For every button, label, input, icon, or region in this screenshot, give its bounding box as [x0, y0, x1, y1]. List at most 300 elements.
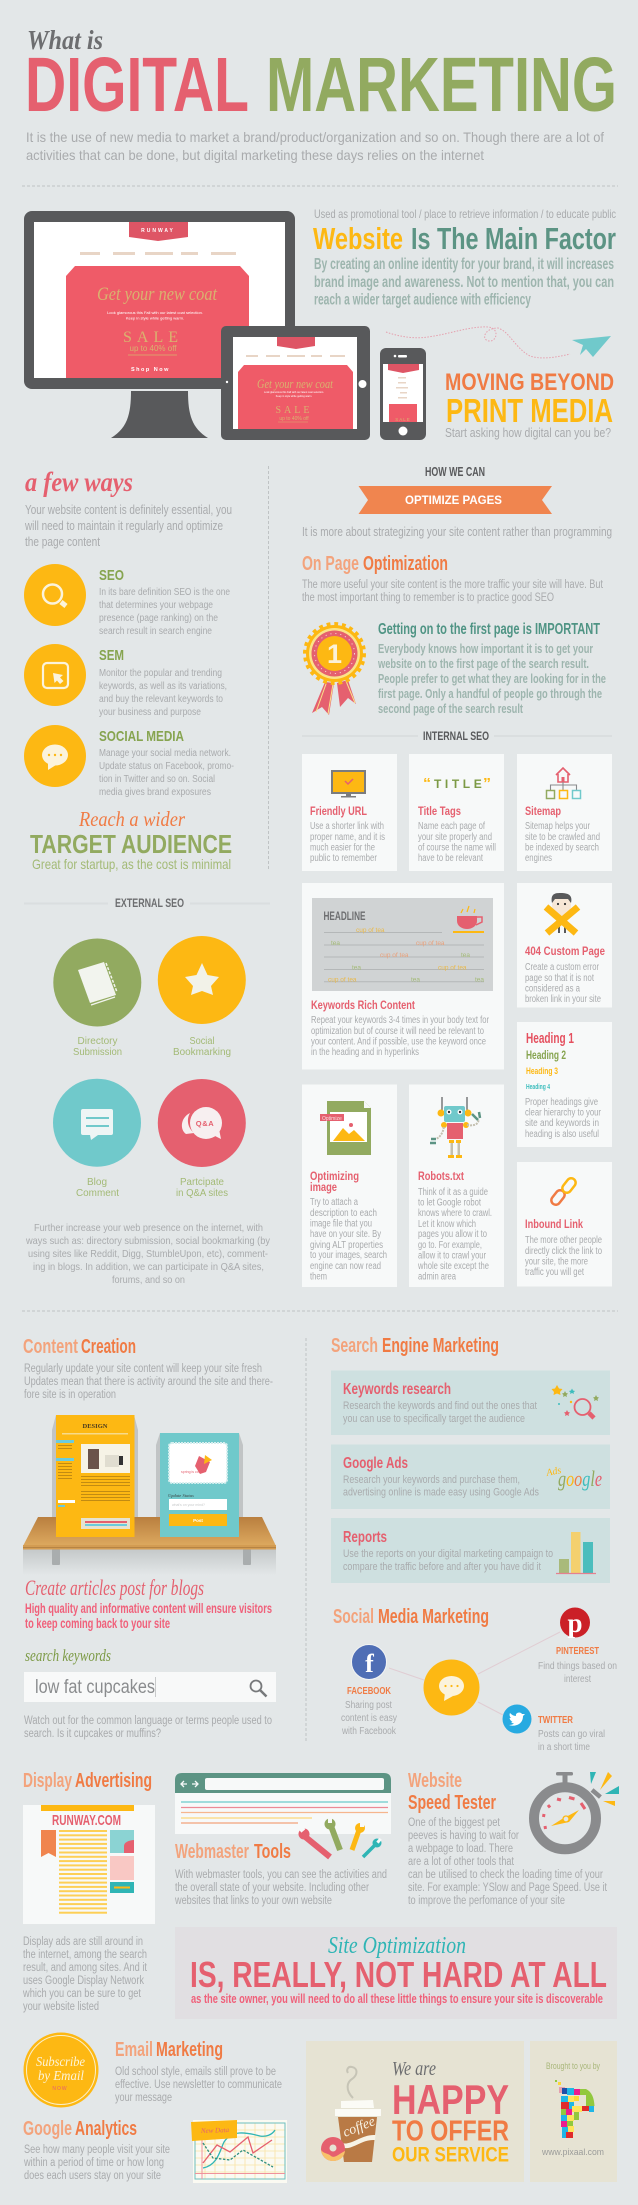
card: optimizing image: Optimize — [322, 1116, 342, 1122]
icon: desktop monitor: SALE — [123, 329, 183, 346]
heading: display advertising: Display — [23, 1770, 73, 1792]
facebook text: with Facebook — [341, 1726, 397, 1737]
icon: first place medal: 1 — [327, 639, 342, 669]
box: reports: Use the reports on your digital marketing campaign to — [343, 1548, 553, 1560]
heading: search engine marketing — [331, 1335, 499, 1357]
icon: google script: Ads — [544, 1465, 562, 1479]
box: google ads: Google Ads — [343, 1455, 408, 1472]
box: keywords research — [331, 1370, 610, 1435]
intro text: It is the use of new media to market a brand/product/organization and so on. Though there are a lot of — [26, 129, 604, 145]
card: sitemap: site to be crawled and — [525, 832, 600, 843]
page: teal status mockup: Update Status — [168, 1493, 194, 1498]
heading: on page optimization — [302, 553, 448, 575]
speed tester text: peeves is having to wait for — [408, 1830, 519, 1842]
icon: SEO magnifier — [24, 564, 86, 626]
webmaster text: the overall state of your website. Including other — [175, 1882, 369, 1894]
webmaster text: websites that links to your own website — [174, 1895, 332, 1907]
icon: pinterest: p — [567, 1608, 583, 1638]
heading: on page optimization: Optimization — [363, 553, 448, 575]
title: DIGITAL — [25, 42, 249, 128]
intro paragraph: Your website content is definitely essential, you — [25, 503, 232, 517]
page: teal status mockup: what's on your mind? — [172, 1503, 205, 1507]
card: keywords rich content: tea — [461, 952, 470, 959]
webmaster text: With webmaster tools, you can see the activities and — [175, 1869, 387, 1881]
card: title tags: of course the name will — [418, 842, 496, 854]
card: inbound link: traffic you will get — [525, 1267, 584, 1278]
heading: webmaster tools: Webmaster — [175, 1840, 249, 1863]
circle labels: Bookmarking — [173, 1047, 231, 1058]
box: keywords research: you can use to specifically target the audience — [343, 1413, 525, 1425]
card: keywords rich content: your content. And if possible, use the keyword once — [311, 1036, 486, 1048]
icon: paper plane with dotted trail — [386, 327, 611, 358]
SEO text: search result in search engine — [99, 626, 212, 637]
card: 404 custom page: Create a custom error — [525, 962, 600, 973]
we are happy text: OUR SERVICE — [392, 2144, 509, 2167]
heading: website speed tester — [408, 1770, 496, 1814]
card: optimizing image: to your images, search — [310, 1250, 387, 1261]
intro paragraph — [24, 503, 232, 549]
search keywords: search. Is it cupcakes or muffins? — [24, 1728, 161, 1740]
icon: coffee and donut: coffee — [341, 2114, 377, 2141]
ribbon: optimize pages: OPTIMIZE PAGES — [405, 495, 502, 507]
pinterest text: interest — [564, 1674, 591, 1685]
card: sitemap: Sitemap — [525, 804, 561, 818]
card: title tags: have to be relevant — [418, 853, 483, 864]
icon: cup of tea — [453, 906, 484, 933]
heading: content creation — [23, 1336, 136, 1358]
icon: Q and A bubble — [158, 1079, 246, 1167]
icon: tablet: SALE — [276, 405, 312, 416]
banner: site optimization — [175, 1927, 617, 2019]
facebook text: Sharing post — [345, 1700, 392, 1711]
SEO text: that determines your webpage — [99, 600, 213, 611]
card: keywords rich content: tea — [352, 964, 361, 972]
website main factor text: Website — [313, 222, 403, 256]
SEM text: keywords, as well as its variations, — [99, 681, 227, 692]
on page text: the most important thing to remember is to practice good SEO — [302, 592, 554, 604]
card: optimizing image — [302, 1084, 397, 1287]
icon: desktop monitor: Get your new coat — [97, 284, 218, 305]
intro paragraph: will need to maintain it regularly and optimize — [24, 519, 223, 533]
card: sitemap: be indexed by search — [525, 842, 599, 854]
display advertising text: uses Google Display Network — [23, 1975, 144, 1987]
card: inbound link: directly click the link to — [525, 1246, 602, 1257]
card: robots.txt: to let Google robot — [418, 1198, 481, 1208]
card: inbound link: Inbound Link — [525, 1217, 583, 1231]
intro text — [26, 129, 604, 163]
panel: optimize pages — [302, 465, 612, 1287]
heading: search engine marketing: Search — [331, 1335, 378, 1357]
card: title tags: Title Tags — [418, 804, 461, 818]
on page text — [302, 579, 604, 604]
card: keywords rich content: Keywords Rich Content — [311, 998, 415, 1012]
social media text — [99, 728, 234, 798]
card: sitemap: engines — [525, 853, 552, 864]
heading: content creation: Creation — [81, 1336, 136, 1358]
panel: website speed tester — [408, 1770, 619, 1907]
card: title tags: TITLE — [434, 777, 485, 791]
card: robots.txt: pages you allow it to — [418, 1229, 487, 1240]
social media text: Update status on Facebook, promo- — [99, 761, 234, 772]
icon: stars and magnifier — [552, 1385, 599, 1418]
facebook text — [341, 1685, 397, 1737]
icon: desktop monitor: RUNWAY — [141, 228, 175, 234]
banner: site optimization: Site Optimization — [328, 1933, 466, 1959]
email text: Old school style, emails still prove to be — [115, 2066, 276, 2078]
logo: pixel P — [555, 2080, 594, 2138]
icon: desktop monitor — [24, 211, 295, 438]
card: keywords rich content: Repeat your keywords 3-4 times in your body text for — [311, 1015, 490, 1026]
card: keywords rich content: cup of tea — [328, 976, 357, 984]
facebook text: content is easy — [341, 1713, 397, 1724]
card: keywords rich content: in the heading and in hyperlinks — [311, 1047, 419, 1058]
panel: search engine marketing — [331, 1335, 610, 1583]
we are happy text: We are — [392, 2058, 436, 2080]
icon: subscribe by email badge: by Email — [38, 2069, 84, 2084]
panel: happy to offer our service — [306, 2041, 524, 2182]
card: keywords rich content: cup of tea — [438, 964, 467, 972]
card: headings: Heading 2 — [526, 1048, 566, 1062]
icon: wrenches — [298, 1817, 382, 1857]
search keywords: Watch out for the common language or terms people used to — [24, 1715, 272, 1727]
speed tester text: One of the biggest pet — [408, 1817, 501, 1829]
icon: coffee and donut — [321, 2067, 381, 2162]
heading: external SEO: EXTERNAL SEO — [115, 896, 184, 910]
title: What is — [27, 25, 103, 55]
heading: social media marketing — [333, 1606, 489, 1628]
icon: bookmark star — [158, 936, 246, 1024]
content text — [24, 1363, 273, 1401]
box: keywords research: Research the keywords and find out the ones that — [343, 1400, 537, 1412]
illustration: browser window — [175, 1773, 391, 1834]
heading: webmaster tools: Tools — [254, 1840, 291, 1863]
box: google ads — [331, 1444, 610, 1509]
heading: social media marketing: Media Marketing — [378, 1606, 489, 1628]
icon: google script: google — [558, 1466, 602, 1491]
card: keywords rich content: tea — [475, 976, 484, 984]
heading: google analytics — [23, 2118, 137, 2140]
search keywords: search keywords — [25, 1646, 111, 1665]
icon: Q and A bubble: Q&A — [196, 1119, 214, 1128]
target audience callout: TARGET AUDIENCE — [30, 829, 232, 859]
icon: stopwatch — [534, 1772, 619, 1849]
card: title tags: Name each page of — [418, 821, 485, 832]
intro text: activities that can be done, but digital marketing these days relies on the internet — [26, 147, 484, 163]
social media text: tion in Twitter and so on. Social — [99, 774, 215, 785]
content text: Updates mean that there is activity around the site and there- — [24, 1376, 273, 1388]
icon: tablet: Look glamorous this Fall with our latest coat selection. — [264, 391, 324, 394]
heading: search engine marketing: Engine Marketing — [382, 1335, 499, 1357]
card: optimizing image: engine can now read — [310, 1261, 381, 1272]
callout: create articles — [25, 1575, 272, 1631]
illustration: shelf with pages — [23, 1415, 276, 1575]
SEM text: Monitor the popular and trending — [99, 668, 222, 679]
card: friendly URL: Friendly URL — [310, 804, 367, 818]
panel: email marketing — [24, 2032, 282, 2108]
card: headings — [517, 1022, 612, 1147]
card: optimizing image: image — [310, 1180, 337, 1194]
icon: smartphone — [380, 348, 426, 440]
box: reports — [331, 1518, 610, 1583]
card: robots.txt: knows where to crawl. — [418, 1208, 492, 1219]
email text: effective. Use newsletter to communicate — [115, 2079, 282, 2091]
ribbon: optimize pages — [358, 486, 552, 514]
panel: webmaster tools — [174, 1773, 391, 1907]
display advertising text: your website listed — [23, 2001, 99, 2013]
card: robots.txt: go to. For example, — [418, 1240, 482, 1251]
icon: subscribe by email badge — [24, 2032, 98, 2108]
icon: bar chart — [556, 1532, 596, 1574]
webmaster text — [174, 1869, 387, 1907]
search keywords — [24, 1646, 276, 1740]
card: friendly URL: proper name, and it is — [310, 832, 385, 843]
card: 404 custom page: considered as a — [525, 984, 580, 994]
card: optimizing image: image file that you — [310, 1218, 372, 1230]
we are happy text: HAPPY — [392, 2076, 509, 2123]
email text: your message — [115, 2092, 172, 2104]
panel: social media marketing — [333, 1606, 617, 1753]
ad mockup — [23, 1805, 155, 1924]
display advertising text: Display ads are still around in — [23, 1936, 143, 1948]
card: inbound link: your site, the more — [525, 1256, 588, 1268]
ad mockup: RUNWAY.COM — [52, 1812, 121, 1829]
box: keywords research: Keywords research — [343, 1381, 451, 1398]
card: title tags: your site properly and — [418, 832, 492, 843]
SEM text: SEM — [99, 647, 124, 664]
callout: create articles: to keep coming back to your site — [25, 1615, 170, 1631]
card: friendly URL: much easier for the — [310, 842, 375, 854]
card: optimizing image: Try to attach a — [310, 1197, 358, 1208]
icon: tablet — [221, 326, 370, 440]
card: robots.txt: allow it to crawl your — [418, 1250, 487, 1262]
icon: facebook: f — [365, 1649, 374, 1678]
analytics text: within a period of time or how long — [23, 2157, 164, 2169]
panel: content creation — [23, 1336, 276, 1740]
card: keywords rich content: cup of tea — [380, 952, 409, 959]
first page important text: second page of the search result — [378, 701, 523, 716]
card: keywords rich content: optimization but of course it will need be relevant to — [311, 1026, 484, 1037]
display advertising text: result, and among sites. And it — [23, 1962, 148, 1974]
card: friendly URL: Use a shorter link with — [310, 821, 384, 832]
pinterest text: PINTEREST — [556, 1646, 599, 1657]
website main factor text: reach a wider target audience with efficiency — [314, 292, 531, 308]
card: title tags: “ — [423, 775, 431, 792]
icon: tablet: up to 40% off — [279, 416, 309, 422]
circle labels: Comment — [76, 1188, 119, 1199]
circle labels: Partcipate — [180, 1177, 224, 1188]
icon: facebook — [352, 1644, 386, 1680]
icon: subscribe by email badge: Subscribe — [36, 2055, 85, 2070]
search box — [24, 1672, 276, 1702]
panel: external SEO — [24, 896, 271, 1286]
icon: tablet: Keep in style while getting warm. — [276, 395, 313, 398]
card: headings: Heading 1 — [526, 1030, 574, 1047]
card: 404 custom page: broken link in your site — [525, 994, 601, 1005]
circle labels — [73, 1036, 231, 1199]
speed tester text — [408, 1817, 608, 1907]
twitter text: TWITTER — [538, 1715, 574, 1726]
icon: twitter — [502, 1704, 532, 1734]
twitter text: Posts can go viral — [538, 1729, 605, 1740]
we are happy text: TO OFFER — [392, 2116, 509, 2148]
icon: subscribe by email badge: NOW — [52, 2086, 68, 2092]
heading: website speed tester: Speed Tester — [408, 1792, 496, 1814]
external SEO paragraph: using sites like Reddit, Digg, StumbleUpon, etc), comment- — [28, 1248, 268, 1260]
external SEO paragraph: ing in blogs. In addition, we can participate in Q&A sites, — [33, 1261, 264, 1273]
facebook text: FACEBOOK — [347, 1685, 391, 1697]
title — [25, 25, 617, 128]
SEO text: In its bare definition SEO is the one — [99, 587, 230, 598]
display advertising text: the internet, among the search — [23, 1949, 147, 1961]
heading: email marketing: Email — [115, 2039, 153, 2061]
social media text: Manage your social media network. — [99, 748, 231, 759]
box: google ads: Research your keywords and purchase them, — [343, 1474, 520, 1486]
speed tester text: a webpage to load. There — [408, 1843, 513, 1855]
analytics text: does each users stay on your site — [24, 2170, 161, 2182]
card: robots.txt: whole site except the — [417, 1261, 489, 1272]
pinterest text: Find things based on — [538, 1661, 617, 1672]
card: robots.txt: Let it know which — [418, 1219, 476, 1230]
page: yellow design mockup: DESIGN — [83, 1423, 108, 1430]
social media text: media gives brand exposures — [99, 787, 211, 798]
website main factor text — [313, 207, 616, 308]
line chart — [191, 2120, 287, 2183]
card: optimizing image: giving ALT properties — [310, 1240, 383, 1251]
card: robots.txt: Think of it as a guide — [418, 1187, 488, 1198]
box: reports: compare the traffic before and after you have did it — [343, 1561, 541, 1573]
box: reports: Reports — [343, 1529, 387, 1546]
card: friendly URL: public to remember — [310, 853, 378, 864]
icon: blog comment — [53, 1079, 141, 1167]
target audience callout: Great for startup, as the cost is minimal — [32, 856, 231, 872]
speed tester text: are a lot of other tools that — [408, 1856, 515, 1868]
card: inbound link — [517, 1162, 612, 1286]
SEM text: your business and purpose — [99, 707, 201, 718]
external SEO paragraph — [25, 1222, 271, 1286]
icon: first place medal — [305, 624, 364, 715]
callout: create articles: Create articles post for blogs — [25, 1575, 204, 1600]
email text — [115, 2066, 282, 2104]
card: headings: Heading 3 — [526, 1066, 558, 1077]
SEO text — [99, 567, 230, 637]
heading: google analytics: Google — [23, 2118, 72, 2140]
heading: social media marketing: Social — [333, 1606, 374, 1628]
external SEO paragraph: ways such as: directory submission, social bookmarking (by — [25, 1235, 271, 1247]
card: 404 custom page — [517, 883, 612, 1008]
panel: display advertising — [22, 1770, 155, 2013]
card: sitemap: Sitemap helps your — [525, 821, 591, 832]
analytics text: See how many people visit your site — [24, 2144, 170, 2156]
card: optimizing image: have on your site. By — [310, 1229, 381, 1240]
card: headings: Proper headings give — [525, 1097, 598, 1108]
card: 404 custom page: 404 Custom Page — [525, 944, 605, 958]
card: title tags — [409, 754, 504, 871]
twitter text — [538, 1715, 605, 1753]
card: keywords rich content: tea — [331, 940, 340, 947]
icon: desktop monitor: Look glamorous this Fall with our latest coat selection. — [107, 310, 203, 315]
content text: fore site is in operation — [24, 1389, 116, 1401]
analytics text — [23, 2144, 170, 2182]
icon: pinterest — [560, 1608, 590, 1638]
card: keywords rich content: cup of tea — [416, 940, 445, 947]
card: robots.txt: admin area — [418, 1272, 456, 1282]
content text: Regularly update your site content will keep your site fresh — [24, 1363, 262, 1375]
circle labels: Directory — [78, 1036, 118, 1047]
icon: desktop monitor: Shop Now — [131, 367, 170, 373]
circle labels: Submission — [73, 1047, 122, 1058]
page: teal status mockup: Post — [193, 1518, 203, 1523]
card: headings: clear hierarchy to your — [525, 1108, 602, 1118]
icon: SEM cursor — [24, 644, 86, 706]
icon: central speech bubble — [424, 1660, 480, 1716]
card: friendly URL — [302, 754, 397, 871]
intro paragraph: the page content — [25, 535, 100, 549]
circle labels: Social — [190, 1036, 214, 1047]
external SEO paragraph: Further increase your web presence on the internet, with — [34, 1222, 263, 1234]
card: keywords rich content: HEADLINE — [324, 911, 366, 923]
icon: desktop monitor: Keep in style while getting warm. — [126, 316, 184, 320]
card: optimizing image: them — [310, 1272, 327, 1282]
box: google ads: advertising online is made easy using Google Ads — [343, 1487, 539, 1499]
heading: internal SEO: INTERNAL SEO — [423, 729, 489, 743]
card: title tags: ” — [483, 775, 491, 792]
we are happy text — [392, 2058, 509, 2167]
heading: website speed tester: Website — [408, 1770, 462, 1792]
icon: tablet: Get your new coat — [257, 376, 333, 391]
target audience callout — [30, 807, 232, 872]
speed tester text: to improve the perfomance of your site — [408, 1895, 565, 1907]
heading: how we can: HOW WE CAN — [425, 465, 485, 479]
heading: display advertising — [23, 1770, 152, 1792]
SEO text: presence (page ranking) on the — [99, 613, 218, 624]
display advertising text — [22, 1936, 148, 2013]
heading: email marketing: Marketing — [156, 2039, 223, 2061]
search box: low fat cupcakes — [35, 1677, 155, 1698]
pinterest text — [538, 1646, 617, 1685]
first page important text — [377, 621, 606, 716]
page: teal status mockup: spring is cool — [181, 1470, 202, 1474]
card: sitemap — [517, 754, 612, 871]
heading: display advertising: Advertising — [75, 1770, 152, 1792]
icon: directory book — [53, 938, 141, 1026]
external SEO paragraph: forums, and so on — [112, 1274, 185, 1286]
card: keywords rich content — [302, 883, 504, 1070]
display advertising text: which you can be sure to get — [22, 1988, 142, 2000]
SEO text: SEO — [99, 567, 124, 584]
icon: social media bubble — [24, 725, 86, 787]
card: keywords rich content: tea — [411, 976, 420, 984]
panel: brought to you by: www.pixaal.com — [541, 2147, 604, 2158]
card: robots.txt: Robots.txt — [418, 1169, 464, 1183]
icon: desktop monitor: up to 40% off — [130, 344, 177, 353]
page: yellow design mockup — [56, 1415, 134, 1537]
panel: google analytics — [23, 2118, 287, 2183]
heading: google analytics: Analytics — [75, 2118, 137, 2140]
card: headings: Heading 4 — [526, 1084, 550, 1091]
card: headings: site and keywords in — [525, 1118, 599, 1129]
heading: email marketing — [115, 2039, 223, 2061]
card: headings: heading is also useful — [525, 1129, 599, 1140]
circle labels: Blog — [87, 1177, 107, 1188]
heading: content creation: Content — [23, 1336, 78, 1358]
panel: a few ways — [24, 467, 234, 872]
twitter text: in a short time — [538, 1742, 590, 1753]
circle labels: in Q&A sites — [176, 1188, 228, 1199]
line chart: New Data — [200, 2126, 230, 2135]
SEM text: and buy the relevant keywords to — [99, 694, 223, 705]
heading: a few ways: a few ways — [25, 467, 133, 497]
card: inbound link: The more other people — [525, 1235, 602, 1246]
